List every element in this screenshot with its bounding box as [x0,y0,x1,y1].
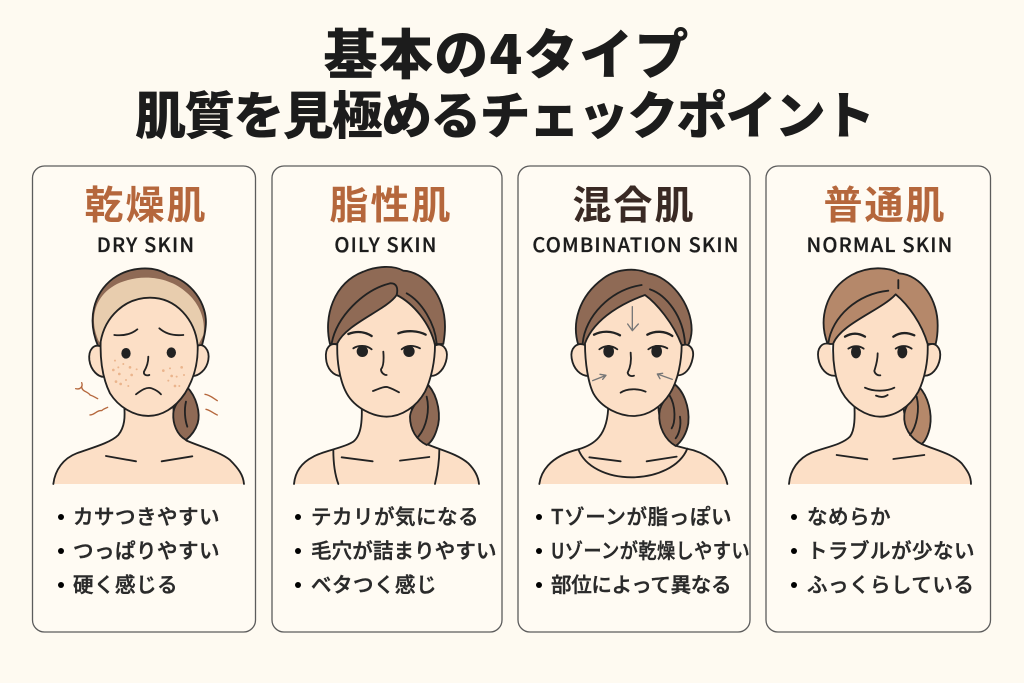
subheading: combination skin: COMBINATION SKIN [532,229,740,258]
list: combination skin points: 部位によって異なる [551,568,732,598]
T-zone and U-zone arrows [593,307,672,381]
list: normal skin points: ふっくらしている [807,568,974,598]
illustration: combination skin face [539,270,727,484]
illustration: normal skin face [789,268,971,484]
illustration: dry skin face [53,268,244,484]
list: oily skin points: テカリが気になる [311,500,479,530]
list: oily skin points [295,500,497,598]
title: 肌質を見極めるチェックポイント [135,75,875,149]
panel: combination skin [518,166,750,632]
list: normal skin points: トラブルが少ない [807,534,975,564]
title: 基本の4タイプ [324,11,688,90]
dryness marks [76,383,217,415]
subheading: normal skin: NORMAL SKIN [806,229,954,258]
list: normal skin points: なめらか [807,500,891,530]
panel: dry skin [32,166,256,632]
list: oily skin points: 毛穴が詰まりやすい [311,534,497,564]
panel: oily skin [272,166,502,632]
freckles [112,360,185,387]
list: dry skin points [58,500,220,598]
list: oily skin points: ベタつく感じ [311,568,437,598]
illustration: oily skin face [294,267,479,484]
heading: oily skin: 脂性肌 [329,175,453,231]
heading: dry skin: 乾燥肌 [84,175,208,231]
title [135,11,875,149]
heading: combination skin: 混合肌 [572,175,696,231]
list: dry skin points: カサつきやすい [73,500,220,530]
subheading: dry skin: DRY SKIN [97,229,195,258]
list: combination skin points: Tゾーンが脂っぽい [551,500,732,530]
list: dry skin points: 硬く感じる [73,568,178,598]
subheading: oily skin: OILY SKIN [334,229,438,258]
heading: normal skin: 普通肌 [823,175,947,231]
panel: normal skin [766,166,990,632]
list: dry skin points: つっぱりやすい [73,534,220,564]
list: combination skin points [536,500,750,598]
list: combination skin points: Uゾーンが乾燥しやすい [551,534,750,564]
list: normal skin points [791,500,975,598]
